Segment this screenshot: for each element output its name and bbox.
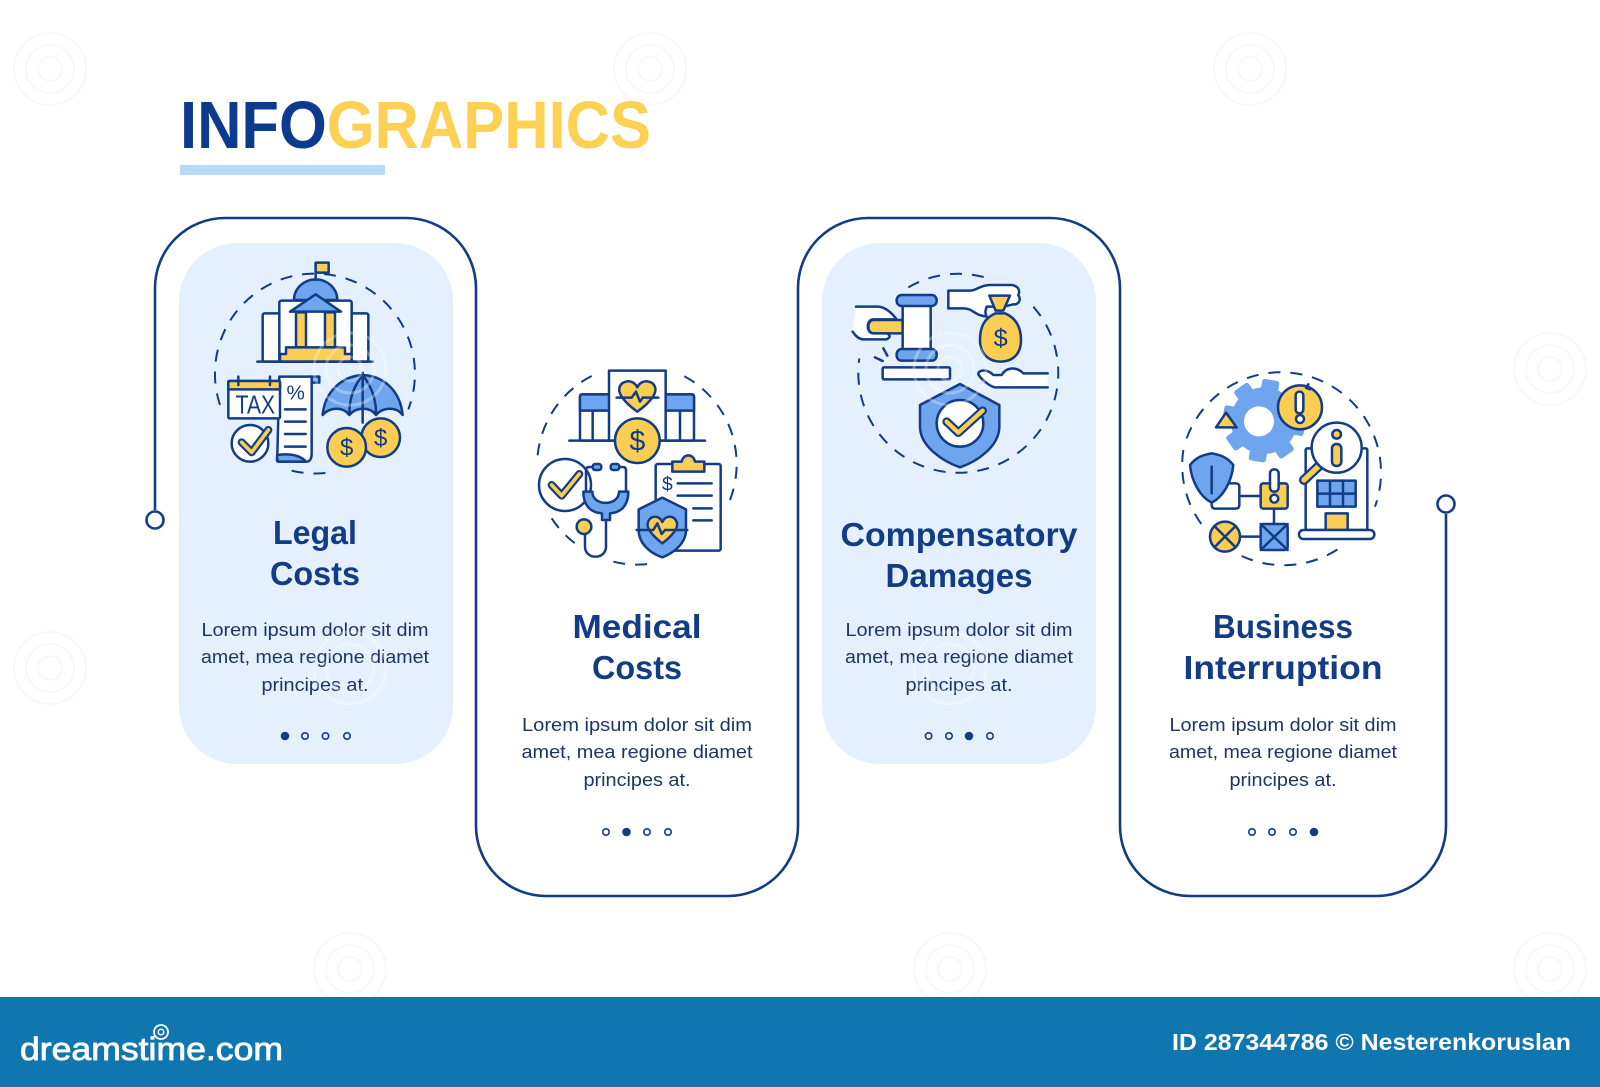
panel: legal costs text [201, 514, 429, 740]
body text: amet, mea regione diamet [201, 647, 429, 667]
footer credit: ID 287344786 © Nesterenkoruslan [1172, 1029, 1571, 1055]
icon: legal costs: $ [340, 435, 353, 462]
icon: compensatory damages: $ [994, 325, 1008, 353]
connecting outline with end markers [146, 218, 1454, 896]
title: INFOGRAPHICS [180, 88, 651, 163]
body text: principes at. [584, 770, 690, 790]
body text: amet, mea regione diamet [522, 742, 752, 762]
heading: compensatory damages: Compensatory [840, 516, 1078, 553]
footer logo: dreamstime.com [20, 1031, 283, 1067]
panel: compensatory damages text [840, 516, 1078, 740]
heading: legal costs: Costs [270, 555, 360, 592]
body text: principes at. [262, 675, 368, 695]
body text: principes at. [1230, 770, 1336, 790]
heading: business interruption: Business [1213, 608, 1353, 645]
heading: legal costs: Legal [273, 514, 357, 551]
icon: legal costs: $ [374, 425, 387, 452]
body text: amet, mea regione diamet [845, 647, 1073, 667]
heading: compensatory damages: Damages [886, 557, 1032, 594]
panel: business interruption text [1169, 608, 1397, 836]
icon: medical costs: $ [662, 475, 673, 496]
icon: legal costs [215, 263, 415, 474]
heading: medical costs: Costs [592, 649, 682, 686]
body text: Lorem ipsum dolor sit dim [522, 715, 752, 735]
panel: medical costs text [522, 608, 752, 836]
pagination dots [282, 732, 350, 740]
icon: medical costs: $ [629, 426, 645, 458]
icon: legal costs: TAX [236, 389, 275, 419]
pagination dots [925, 732, 993, 740]
pagination dots [603, 828, 671, 836]
panel: light background 3 [822, 243, 1096, 764]
heading: business interruption: Interruption [1184, 649, 1382, 686]
pagination dots [1249, 828, 1318, 836]
body text: Lorem ipsum dolor sit dim [202, 620, 428, 640]
heading: medical costs: Medical [572, 608, 702, 645]
body text: Lorem ipsum dolor sit dim [846, 620, 1072, 640]
body text: amet, mea regione diamet [1169, 742, 1397, 762]
icon: medical costs [537, 371, 737, 565]
icon: business interruption [1182, 372, 1381, 565]
body text: Lorem ipsum dolor sit dim [1170, 715, 1396, 735]
icon: legal costs: % [286, 381, 305, 404]
footer bar [0, 997, 1600, 1087]
icon: compensatory damages [853, 274, 1058, 473]
body text: principes at. [906, 675, 1012, 695]
panel: light background 1 [179, 243, 453, 764]
